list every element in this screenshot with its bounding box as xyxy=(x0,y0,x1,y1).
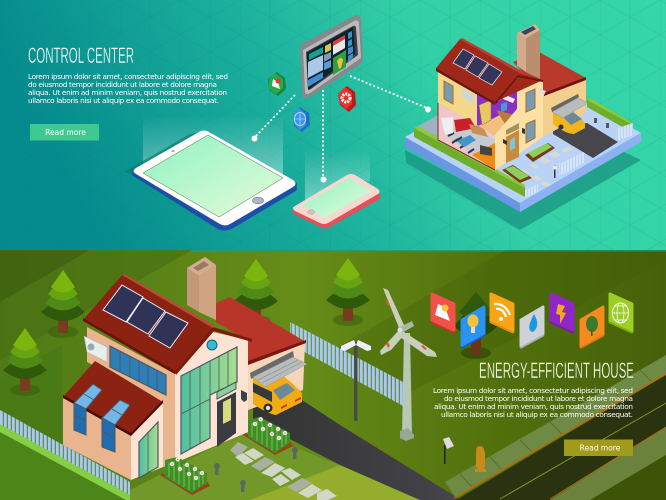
chimney xyxy=(517,24,540,80)
connector: dotted lines xyxy=(255,76,427,178)
solar panels xyxy=(103,285,188,348)
panel: control center banner xyxy=(0,0,666,250)
security cameras xyxy=(341,340,371,421)
driveway xyxy=(253,400,458,500)
solar panels xyxy=(453,49,502,85)
main roof xyxy=(436,38,543,105)
fire hydrant xyxy=(475,446,486,472)
button: read more xyxy=(564,440,633,456)
upper window strip xyxy=(110,346,166,395)
right fence xyxy=(290,322,405,407)
wall lamp xyxy=(241,390,247,402)
icon: red gear hexagon xyxy=(338,86,356,112)
icon: wifi xyxy=(491,294,513,332)
icon: globe xyxy=(610,294,632,332)
ground bands xyxy=(0,250,666,500)
light beam above tablet xyxy=(143,115,283,178)
app icons xyxy=(432,294,632,347)
left fence xyxy=(0,410,130,500)
illustration: isometric house cutaway xyxy=(405,24,641,230)
driveway xyxy=(553,123,618,158)
flower beds xyxy=(502,143,555,183)
tree behind icons xyxy=(454,292,498,359)
garden lamps xyxy=(214,447,298,492)
text block: control center description: ullamco laboris nisi ut aliquip ex ea commodo consequat. xyxy=(28,96,219,105)
car xyxy=(553,110,585,134)
carport awning xyxy=(250,351,307,387)
flower beds xyxy=(160,417,293,495)
icon: lightning xyxy=(551,294,573,332)
text block: house description: ullamco laboris nisi ut aliquip ex ea commodo consequat. xyxy=(441,410,633,419)
main front wall xyxy=(175,332,248,463)
door xyxy=(217,382,236,447)
button: read more: Read more xyxy=(45,128,86,137)
icon: bulb xyxy=(462,307,484,347)
garage xyxy=(216,297,306,410)
street xyxy=(454,374,666,500)
text block: control center description xyxy=(28,72,228,105)
text block: control center description: aliqua. Ut enim ad minim veniam, quis nostrud exercitation xyxy=(28,88,227,97)
connector end dots xyxy=(252,106,431,182)
icon: bell xyxy=(432,294,454,332)
wind turbine xyxy=(380,288,437,441)
text block: control center description: Lorem ipsum dolor sit amet, consectetur adipiscing elit, sed xyxy=(28,72,228,81)
icon: control panel xyxy=(300,15,363,98)
dormer windows xyxy=(74,384,130,452)
fence and paving xyxy=(518,118,633,198)
mailbox xyxy=(443,437,454,464)
car xyxy=(253,376,302,415)
round window xyxy=(207,340,217,350)
icon: tree xyxy=(581,307,603,347)
large green window xyxy=(181,347,237,454)
light beam above phone xyxy=(305,150,370,202)
text block: house description xyxy=(433,386,633,419)
icon: phone xyxy=(293,174,380,228)
button: read more: Read more xyxy=(580,444,621,452)
upper wall xyxy=(87,327,175,467)
sidewalk xyxy=(445,355,666,498)
icon: green bell hexagon xyxy=(268,72,286,96)
illustration: main house xyxy=(63,257,307,480)
garage xyxy=(513,52,586,137)
text block: house description: do eiusmod tempor incididunt ut labore et dolore magna xyxy=(444,394,633,403)
stepping stones xyxy=(230,442,337,500)
icon: water drop xyxy=(521,307,543,347)
air conditioner xyxy=(84,336,107,362)
chimney xyxy=(187,257,216,320)
button: read more xyxy=(30,124,99,140)
extension xyxy=(63,361,163,480)
main roof xyxy=(83,274,252,375)
icon: blue globe hexagon xyxy=(293,107,310,132)
text block: house description: aliqua. Ut enim ad minim veniam, quis nostrud exercitation xyxy=(434,402,633,411)
walls and rooms xyxy=(438,72,546,170)
text block: house description: Lorem ipsum dolor sit amet, consectetur adipiscing elit, sed xyxy=(433,386,633,395)
text block: control center description: do eiusmod tempor incididunt ut labore et dolore magna xyxy=(28,80,217,89)
title: control center: CONTROL CENTER xyxy=(28,43,134,68)
carport awning xyxy=(551,94,588,118)
icon: tablet xyxy=(124,130,296,230)
panel: energy-efficient house banner xyxy=(0,250,666,500)
trees xyxy=(3,258,370,396)
